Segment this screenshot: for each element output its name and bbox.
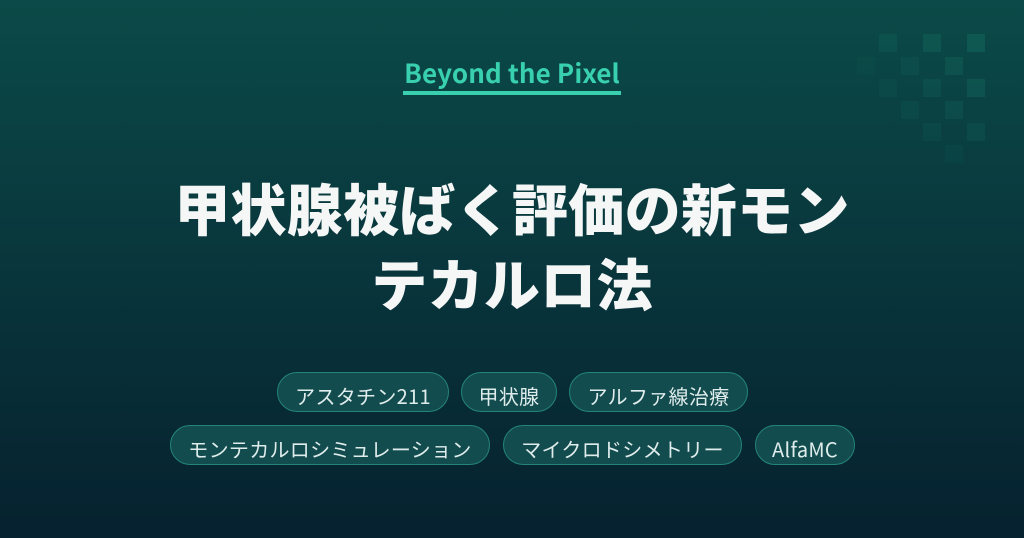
title: テカルロ法 [371,242,653,323]
tag: マイクロドシメトリー: マイクロドシメトリー [521,434,724,463]
brand label: Beyond the Pixel: Beyond the Pixel [404,54,620,91]
tag: アスタチン211: アスタチン211 [295,381,431,410]
tag: AlfaMC: AlfaMC [772,434,838,463]
tag: AlfaMC [755,425,855,465]
title [174,167,850,323]
tag: 甲状腺: 甲状腺 [479,381,539,410]
tag: アルファ線治療 [569,372,748,412]
tag: アルファ線治療: アルファ線治療 [588,381,729,410]
title: 甲状腺被ばく評価の新モン [174,167,850,248]
tag: 甲状腺 [461,372,557,412]
tag: モンテカルロシミュレーション [170,425,490,465]
decorative square pattern [879,34,985,141]
brand underline [403,91,621,95]
tag: アスタチン211 [277,372,449,412]
tag: モンテカルロシミュレーション: モンテカルロシミュレーション [188,434,472,463]
tag: マイクロドシメトリー [503,425,742,465]
tags [170,372,855,465]
